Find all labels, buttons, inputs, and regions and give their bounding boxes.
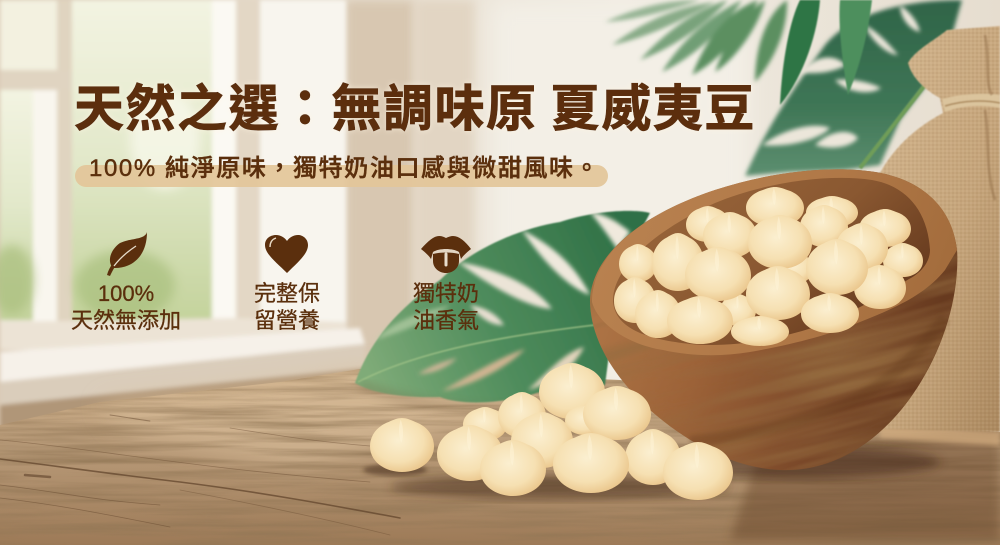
icon: tongue and lips	[421, 236, 471, 273]
macadamia nuts in bowl	[614, 187, 923, 346]
burlap sack	[860, 26, 1000, 432]
subtitle pill	[75, 155, 608, 187]
icon: heart	[265, 235, 308, 273]
label: 留營養	[254, 308, 320, 333]
palm and monstera leaves, upper right	[605, 0, 962, 176]
wooden table	[0, 369, 1000, 545]
label: 100%	[98, 281, 154, 306]
pill background	[75, 165, 608, 187]
large dark leaf	[745, 0, 962, 176]
feature: preserved nutrition	[254, 235, 320, 333]
bowl body	[590, 169, 957, 470]
label: 完整保	[254, 281, 320, 306]
feature: unique buttery aroma	[413, 236, 479, 333]
window	[0, 0, 365, 430]
title: 天然之選：無調味原 夏威夷豆	[74, 81, 756, 137]
bowl interior	[613, 178, 930, 345]
macadamia nuts on table	[363, 363, 733, 500]
icon: leaf	[107, 232, 147, 276]
label: 天然無添加	[71, 308, 181, 333]
label: 獨特奶	[413, 281, 479, 306]
wooden bowl	[519, 83, 1000, 545]
feature: natural, no additives	[71, 232, 181, 333]
subtitle text: 100% 純淨原味，獨特奶油口感與微甜風味。	[89, 155, 600, 182]
label: 油香氣	[413, 308, 479, 333]
monstera leaf behind bowl	[355, 211, 650, 412]
wood grain	[519, 83, 1000, 545]
bowl rim highlight	[592, 169, 957, 355]
